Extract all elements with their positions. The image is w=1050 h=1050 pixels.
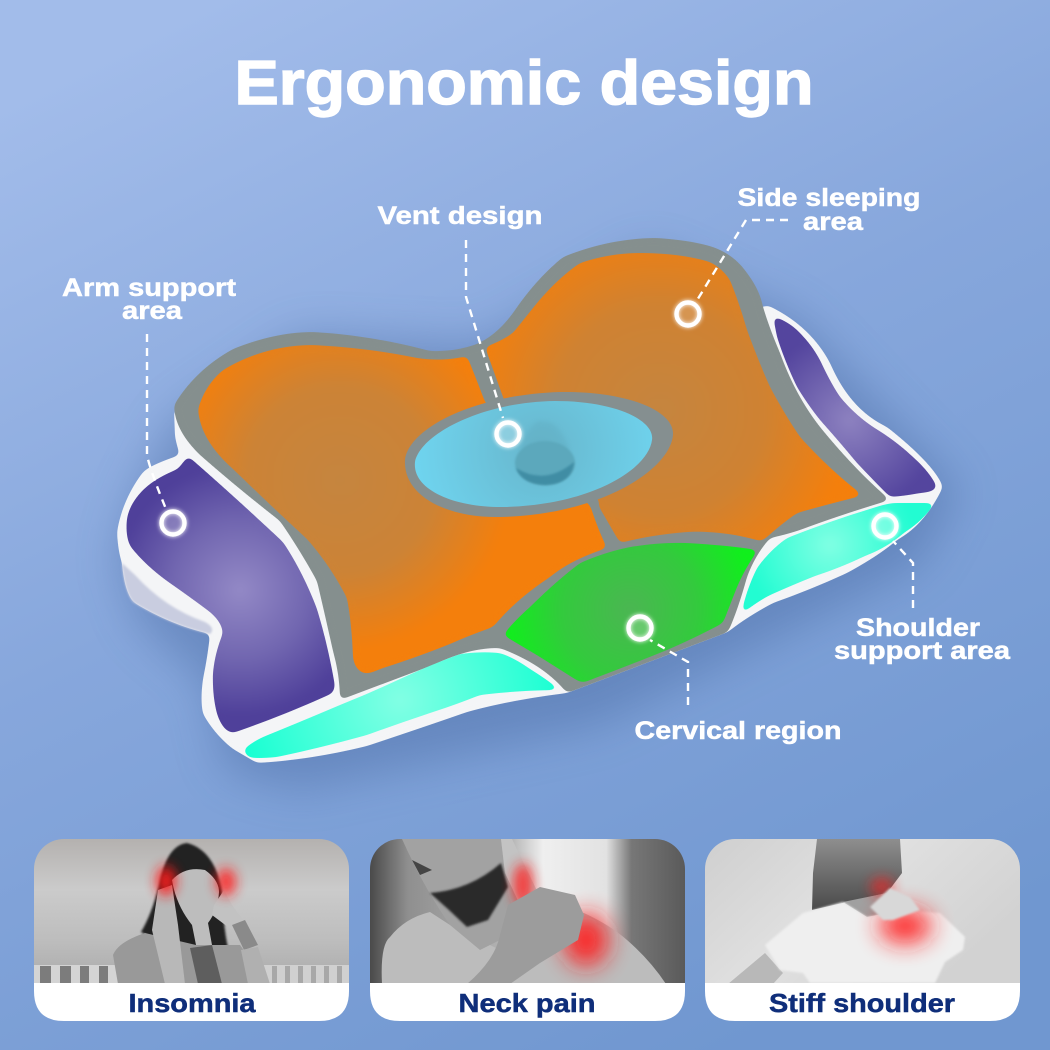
pillow side mesh [122, 563, 212, 634]
callout: vent design [378, 202, 542, 446]
purple right zone [773, 316, 937, 497]
label panel [370, 983, 685, 1021]
orange zone: side sleeping [485, 253, 861, 543]
purple arm support zone [126, 456, 335, 733]
orange zone: left [198, 345, 607, 674]
label: Stiff shoulder [769, 988, 955, 1018]
teal bottom zone [243, 652, 560, 758]
label panel [705, 983, 1020, 1021]
label: Insomnia [128, 988, 256, 1018]
blue vent zone [415, 401, 652, 507]
callout: arm support area: area [122, 297, 183, 325]
callout: vent design: Vent design [378, 202, 542, 230]
pillow illustration [117, 238, 960, 790]
title: Ergonomic design [234, 49, 814, 118]
photo: woman holding her shoulder [705, 839, 1020, 984]
green cervical zone [503, 543, 758, 682]
callout: cervical region: Cervical region [634, 717, 842, 745]
card: insomnia [34, 839, 349, 1021]
label panel [34, 983, 349, 1021]
card: neck pain [370, 839, 685, 1021]
callout: arm support area [62, 274, 237, 534]
photo: man holding his neck [370, 839, 685, 984]
callout: cervical region [628, 616, 842, 745]
callout: arm support area: Arm support [62, 274, 237, 302]
label: Neck pain [458, 988, 596, 1018]
callout: side sleeping area [676, 184, 920, 326]
pillow shadow [117, 250, 960, 790]
callout: side sleeping area: area [803, 208, 864, 236]
callout: shoulder support area [834, 514, 1011, 665]
photo: woman holding her temples [34, 839, 349, 984]
callout: shoulder support area: Shoulder [856, 614, 980, 642]
card: stiff shoulder [705, 839, 1020, 1021]
pillow white base [117, 305, 943, 763]
teal right zone [741, 503, 935, 615]
grey ring around vent [405, 392, 673, 517]
vent hole [515, 421, 575, 485]
callout: side sleeping area: Side sleeping [738, 184, 920, 212]
grey frame [174, 238, 890, 700]
callout: shoulder support area: support area [834, 637, 1011, 665]
